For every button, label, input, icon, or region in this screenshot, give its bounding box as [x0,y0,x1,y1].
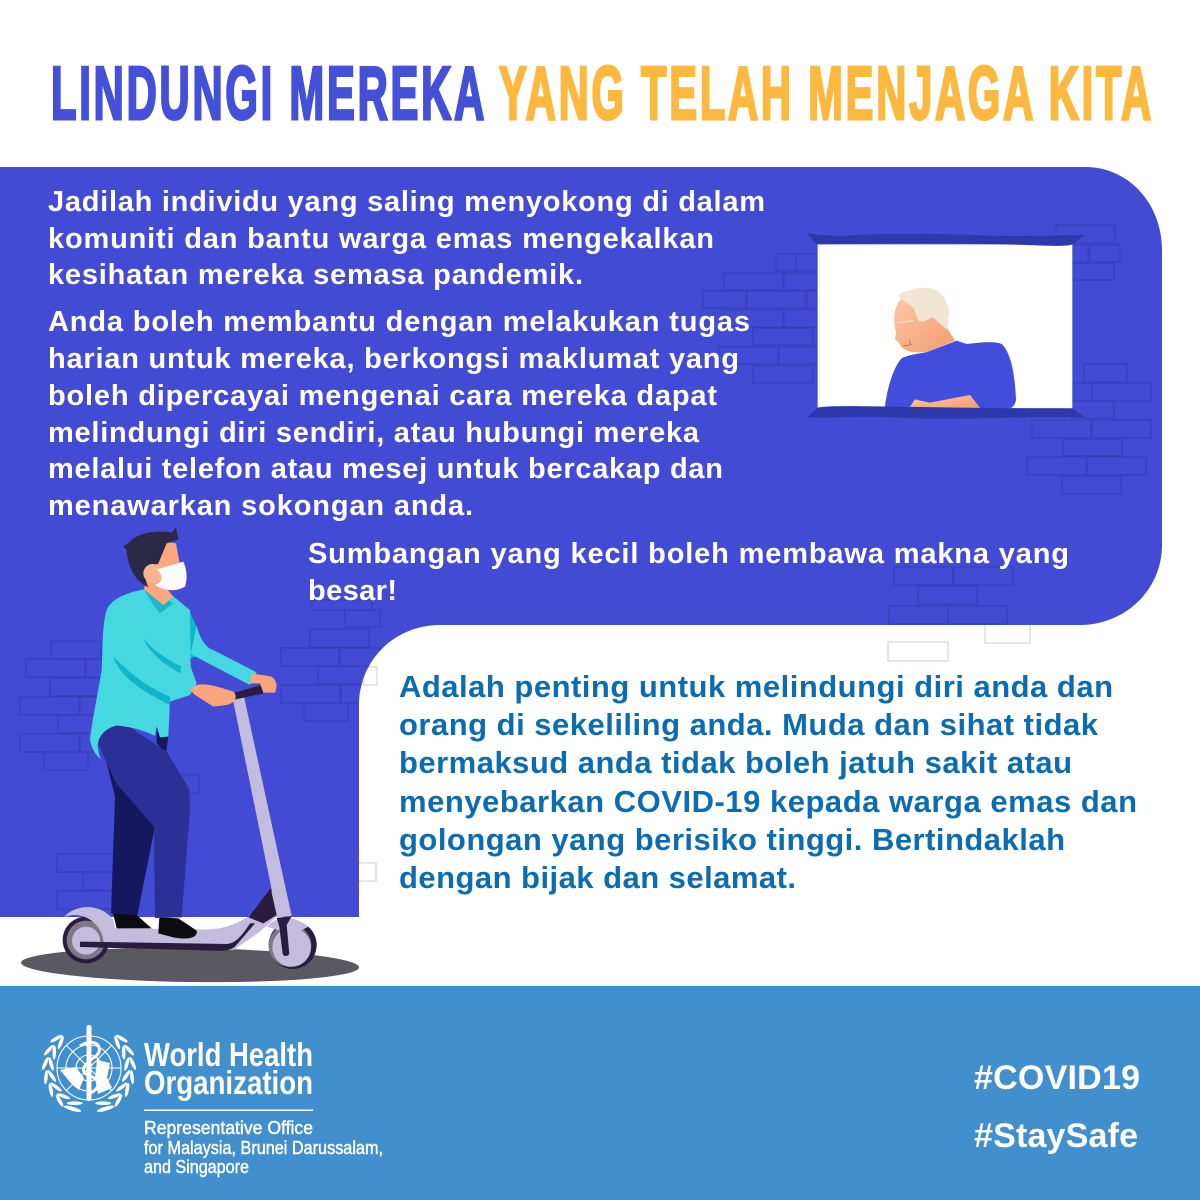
paragraph: community support [48,186,765,291]
paragraph: how to help: melalui telefon atau mesej untuk bercakap dan [48,453,723,485]
pale bricks on white background [332,620,1030,881]
paragraph: protect yourself: golongan yang berisiko tinggi. Bertindaklah [399,822,1065,857]
title: LINDUNGI MEREKA [51,51,487,135]
WHO wordmark: World Health [144,1036,313,1073]
paragraph: community support: Jadilah individu yang saling menyokong di dalam [48,186,765,218]
ground shadow [21,946,359,984]
paragraph: small contribution: besar! [308,575,397,607]
footer band [0,986,1200,1200]
trousers [95,726,190,918]
hands on handlebar [190,673,276,707]
paragraph: community support: kesihatan mereka semasa pandemik. [48,259,583,291]
window sill [807,406,1085,419]
hashtags [974,1059,1140,1155]
paragraph: how to help [48,306,750,522]
shirt [89,588,257,760]
paragraph: protect yourself: bermaksud anda tidak boleh jatuh sakit atau [399,745,1072,780]
man on scooter [63,527,317,969]
WHO wordmark: and Singapore [144,1157,249,1177]
WHO wordmark: Organization [144,1064,313,1101]
paragraph: small contribution: Sumbangan yang kecil boleh membawa makna yang [308,538,1069,570]
WHO wordmark [144,1036,383,1177]
paragraph: small contribution [308,538,1069,607]
paragraph: how to help: menawarkan sokongan anda. [48,490,473,522]
hashtags: #COVID19 [974,1059,1140,1097]
paragraph: protect yourself: orang di sekeliling anda. Muda dan sihat tidak [399,707,1099,742]
head with face mask [123,527,187,605]
paragraph: how to help: Anda boleh membantu dengan melakukan tugas [48,306,750,338]
panel: blue speech background [0,167,1162,917]
hashtags: #StaySafe [974,1117,1138,1155]
paragraph: how to help: melindungi diri sendiri, atau hubungi mereka [48,417,700,449]
WHO wordmark: for Malaysia, Brunei Darussalam, [144,1138,383,1158]
elderly man figure [885,288,1016,409]
WHO wordmark: Representative Office [144,1118,313,1138]
scooter [63,685,317,969]
icon: WHO emblem [41,1025,137,1113]
window opening [818,244,1072,408]
paragraph: how to help: boleh dipercayai mengenai cara mereka dapat [48,380,717,412]
paragraph: how to help: harian untuk mereka, berkongsi maklumat yang [48,343,739,375]
paragraph: protect yourself: dengan bijak dan selamat. [399,860,796,895]
paragraph: protect yourself [399,669,1137,895]
shoes [113,912,197,939]
bricks on panel [20,225,1151,909]
window lintel [807,233,1085,246]
window with elderly man [807,233,1085,419]
paragraph: protect yourself: Adalah penting untuk melindungi diri anda dan [399,669,1113,704]
paragraph: community support: komuniti dan bantu warga emas mengekalkan [48,223,714,255]
paragraph: protect yourself: menyebarkan COVID-19 kepada warga emas dan [399,784,1137,819]
